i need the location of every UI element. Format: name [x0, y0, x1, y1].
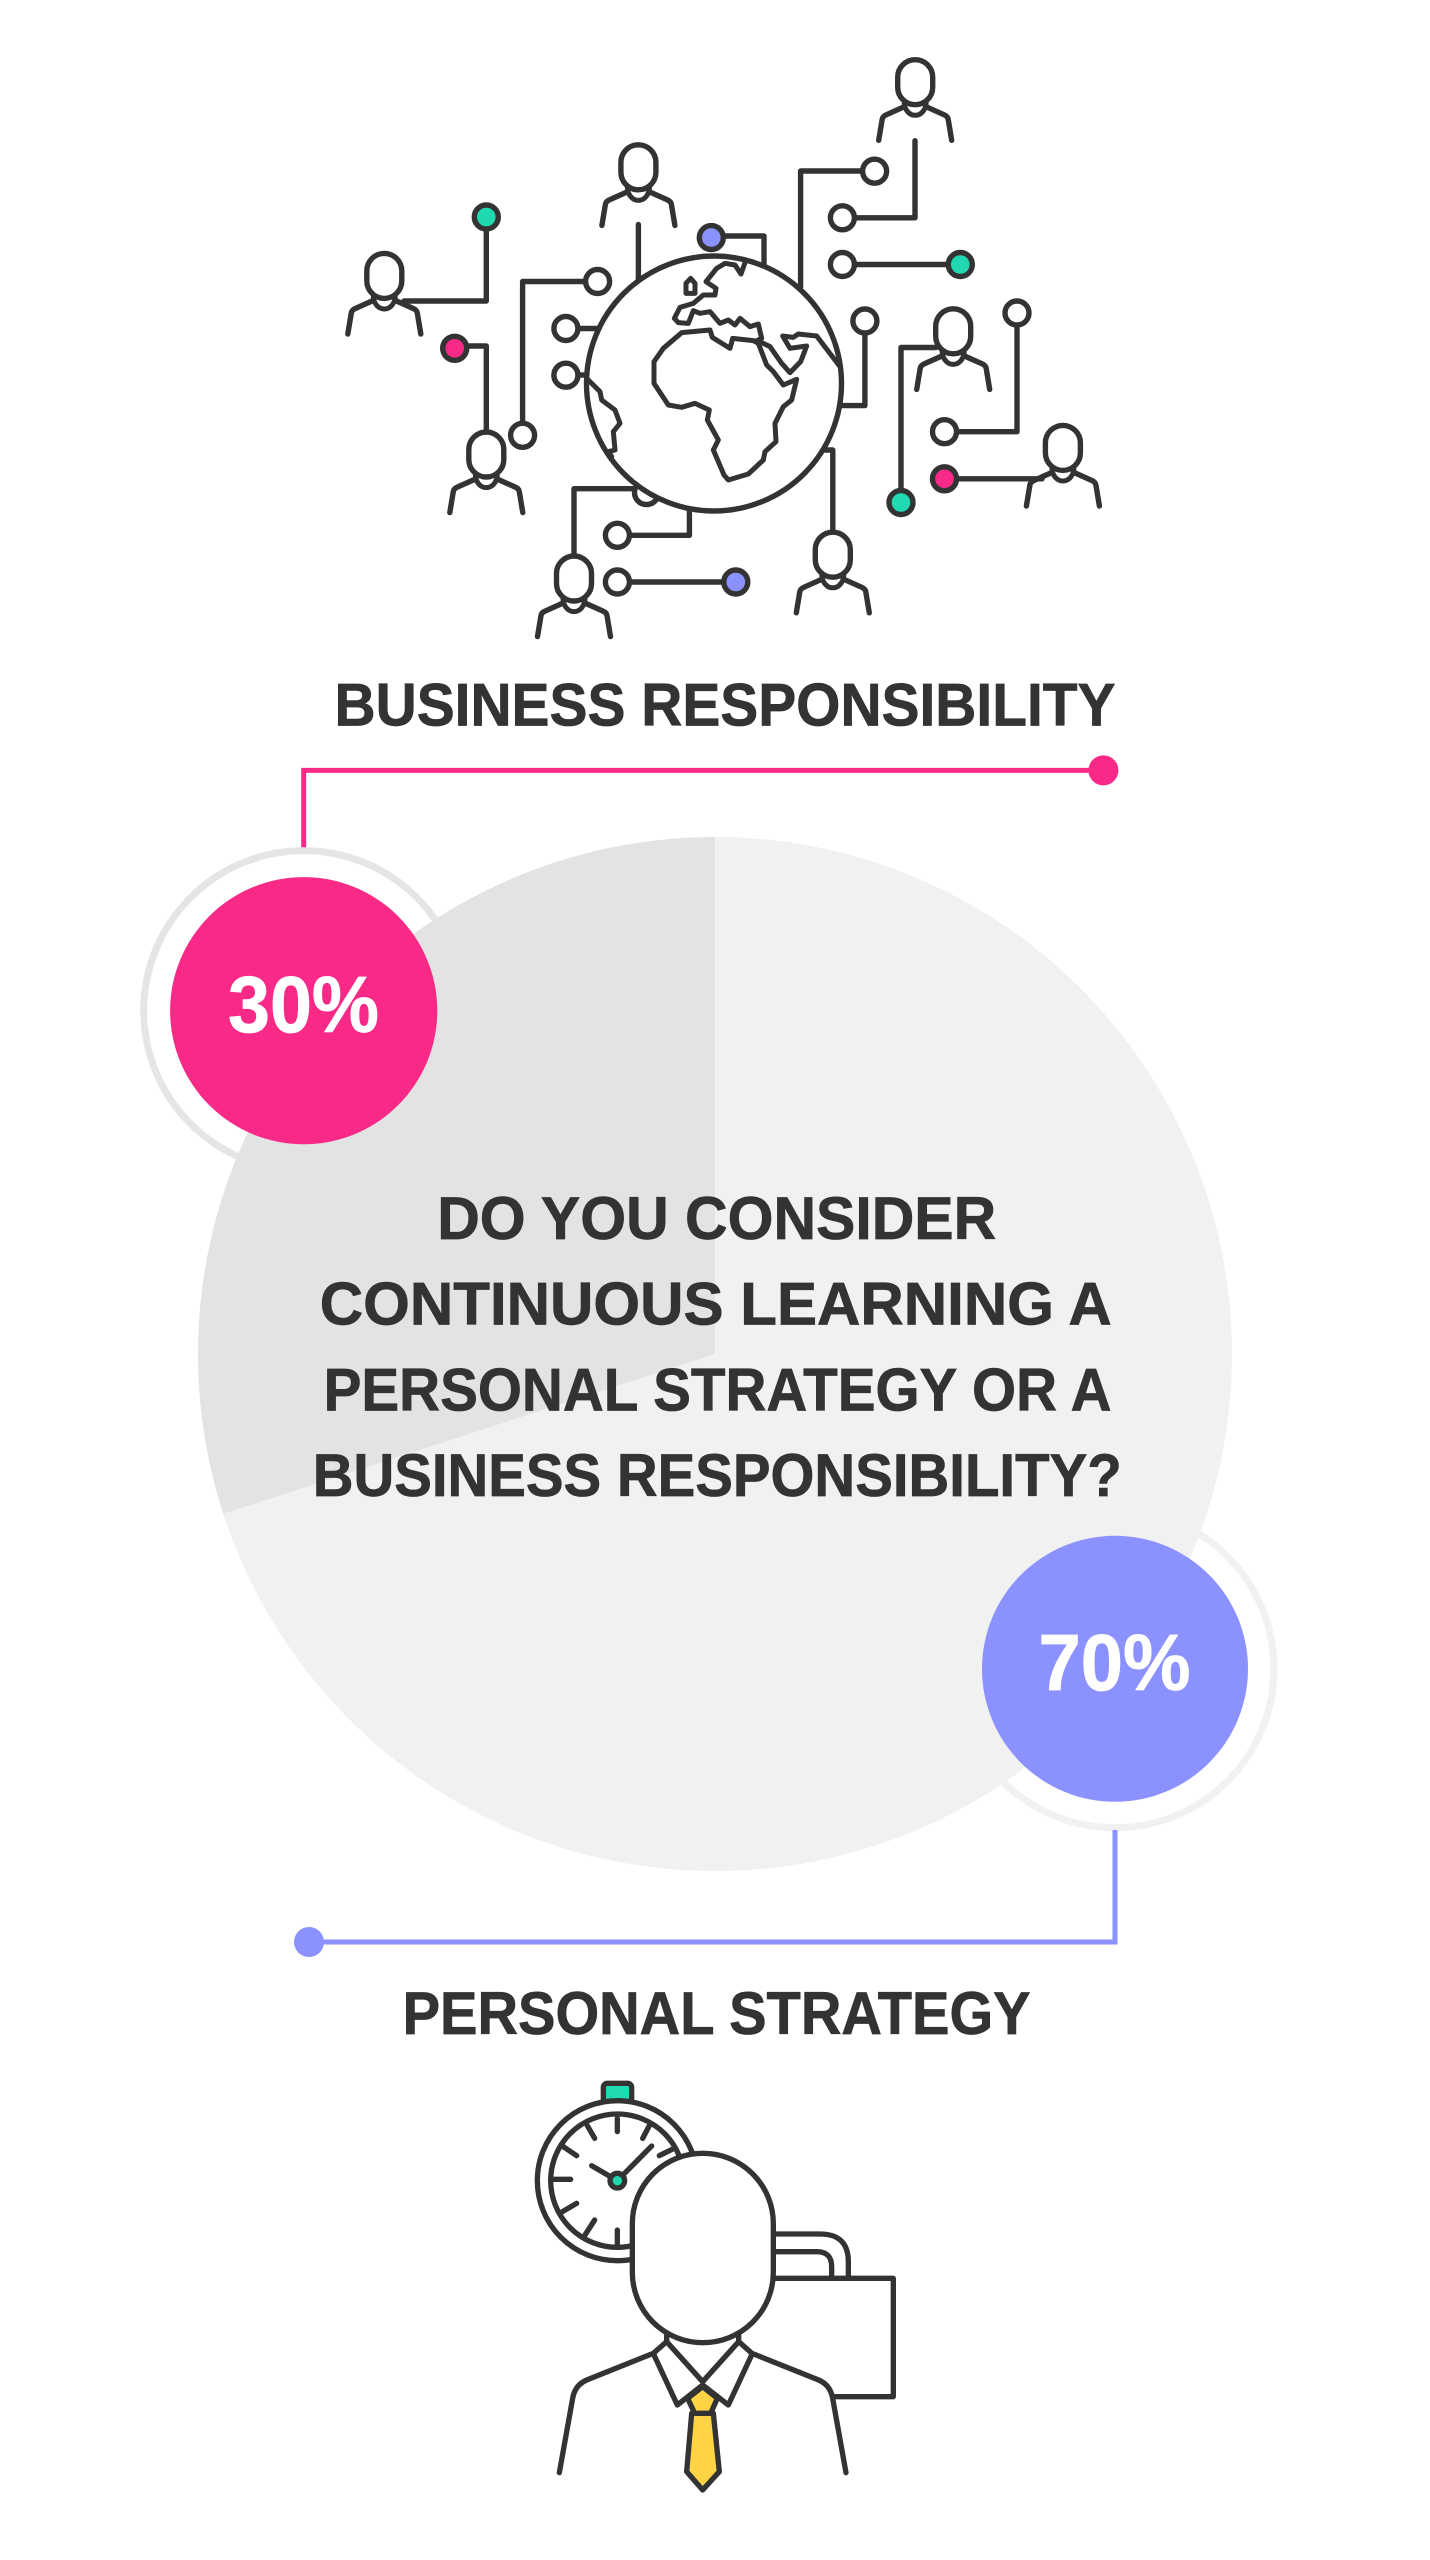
heading: business responsibility: BUSINESS RESPONSIBILITY — [334, 671, 1116, 738]
question text: PERSONAL STRATEGY OR A — [324, 1357, 1112, 1424]
icon: person head and suit — [559, 2153, 846, 2490]
icon: stopwatch — [537, 2083, 697, 2261]
badge: 70%: 70% — [1038, 1618, 1190, 1707]
question text: DO YOU CONSIDER — [437, 1185, 996, 1252]
pie chart: 30 / 70 — [198, 837, 1232, 1871]
icon: globe — [586, 256, 842, 511]
people figures — [348, 60, 1099, 637]
network nodes: white — [511, 159, 1029, 594]
question text: CONTINUOUS LEARNING A — [320, 1271, 1112, 1338]
ring: 70% — [956, 1510, 1274, 1828]
illustration: businessperson with stopwatch and briefcase — [537, 2083, 893, 2490]
illustration: global business network — [348, 60, 1099, 637]
heading: personal strategy: PERSONAL STRATEGY — [403, 1980, 1031, 2047]
ring: 30% — [144, 851, 464, 1171]
connector lines — [404, 141, 1042, 582]
network nodes: coloured — [443, 205, 972, 594]
question text: BUSINESS RESPONSIBILITY? — [313, 1442, 1122, 1509]
badge: 30% — [170, 877, 437, 1144]
connector: 30% to business responsibility — [304, 755, 1118, 850]
connector: 70% to personal strategy — [294, 1830, 1115, 1957]
badge: 70% — [982, 1536, 1248, 1802]
icon: tie — [687, 2387, 719, 2490]
badge: 30%: 30% — [228, 960, 379, 1049]
question text — [313, 1185, 1122, 1509]
icon: briefcase — [760, 2234, 893, 2397]
